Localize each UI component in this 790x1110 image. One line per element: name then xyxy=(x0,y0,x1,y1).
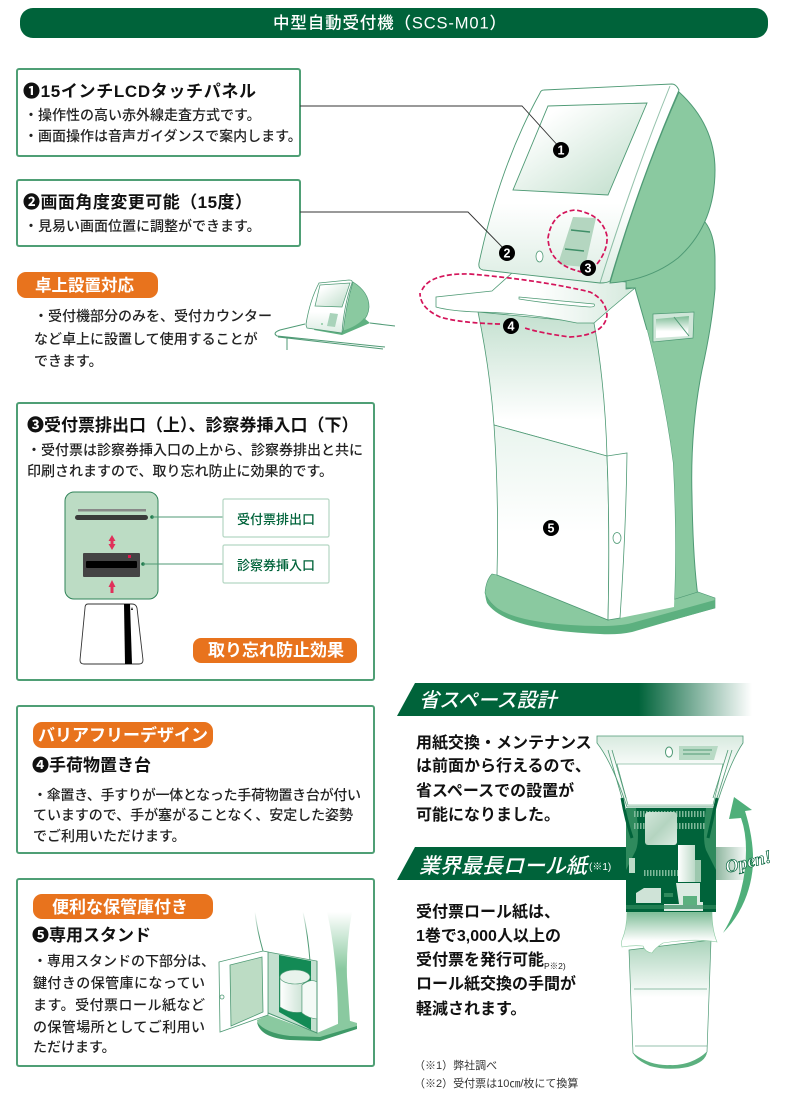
panel: ticket outlet xyxy=(17,403,374,680)
panel: storage: の保管場所としてご利用い xyxy=(33,1019,205,1035)
text block: roll paper xyxy=(416,902,576,1018)
arrow: open xyxy=(723,797,753,933)
panel: screen angle: ・見易い画面位置に調整ができます。 xyxy=(24,218,261,234)
footnotes xyxy=(414,1058,578,1090)
panel: screen angle xyxy=(17,180,300,246)
number markers: 3 xyxy=(585,262,592,276)
panel: barrier-free: ・傘置き、手すりが一体となった手荷物置き台が付い xyxy=(33,787,361,803)
text block: space-saving: 省スペースでの設置が xyxy=(416,781,574,800)
panel: ticket outlet: 印刷されますので、取り忘れ防止に効果的です。 xyxy=(27,463,333,479)
stand front xyxy=(478,312,607,456)
label: tabletop: 卓上設置対応 xyxy=(35,276,134,295)
lower column xyxy=(629,940,711,1068)
panel: LCD touch panel: ❶15インチLCDタッチパネル xyxy=(23,82,256,101)
ticket slots xyxy=(559,217,596,267)
label: tabletop xyxy=(17,272,158,298)
text block: roll paper: P※2) xyxy=(544,961,566,971)
panel: storage: ます。受付票ロール紙など xyxy=(33,997,205,1013)
text block: space-saving: は前面から行えるので、 xyxy=(416,756,591,775)
illustration: open storage xyxy=(219,912,357,1041)
open top panel xyxy=(597,736,743,807)
footnotes: （※2）受付票は10㎝/枚にて換算 xyxy=(414,1076,578,1090)
text block: roll paper: 1巻で3,000人以上の xyxy=(416,926,561,945)
slot diagram xyxy=(65,492,223,664)
text block: roll paper: 受付票を発行可能 xyxy=(416,950,544,969)
panel: barrier-free: ていますので、手が塞がることなく、安定した姿勢 xyxy=(33,807,353,823)
panel: ticket outlet: ・受付票は診察券挿入口の上から、診察券排出と共に xyxy=(27,442,363,458)
panel: storage: 便利な保管庫付き xyxy=(52,897,188,917)
text block: tabletop xyxy=(34,308,272,369)
number markers: 4 xyxy=(508,320,515,334)
panel: storage: ❺専用スタンド xyxy=(32,926,151,945)
head face xyxy=(479,84,679,283)
number markers: 1 xyxy=(558,144,565,158)
number markers: 5 xyxy=(548,522,555,536)
text block: tabletop: ・受付機部分のみを、受付カウンター xyxy=(34,308,272,324)
panel: LCD touch panel: ・操作性の高い赤外線走査方式です。 xyxy=(24,107,261,123)
banner: longest roll: (※1) xyxy=(589,862,611,873)
panel: barrier-free: ❹手荷物置き台 xyxy=(32,755,151,775)
rear column window xyxy=(653,312,694,342)
title bar xyxy=(20,8,768,38)
leader lines xyxy=(300,106,561,252)
panel: storage: ただけます。 xyxy=(33,1039,116,1055)
banner: longest roll: 業界最長ロール紙 xyxy=(418,854,592,878)
panel: LCD touch panel: ・画面操作は音声ガイダンスで案内します。 xyxy=(24,128,302,144)
stand door xyxy=(494,425,609,620)
footnotes: （※1）弊社調べ xyxy=(414,1058,497,1072)
badge: prevention xyxy=(193,638,357,663)
text block: space-saving: 用紙交換・メンテナンス xyxy=(416,734,592,752)
text block: space-saving: 可能になりました。 xyxy=(416,805,560,824)
text block: roll paper: ロール紙交換の手間が xyxy=(416,974,576,993)
illustration: tabletop kiosk xyxy=(275,280,395,350)
banner: space-saving xyxy=(397,683,752,716)
label: card insert xyxy=(223,545,329,583)
illustration: open kiosk xyxy=(597,736,774,1069)
highlight 3 xyxy=(548,210,607,272)
panel: storage xyxy=(17,879,374,1066)
label: card insert: 診察券挿入口 xyxy=(237,558,315,573)
white stand body xyxy=(595,330,675,620)
panel: storage: ・専用スタンドの下部分は、 xyxy=(33,953,215,969)
kiosk illustration xyxy=(300,84,715,634)
panel: barrier-free: バリアフリーデザイン xyxy=(38,725,208,745)
dome xyxy=(610,92,715,283)
panel: LCD touch panel xyxy=(17,69,302,156)
label: ticket outlet xyxy=(223,499,329,537)
panel: ticket outlet: ❸受付票排出口（上）、診察券挿入口（下） xyxy=(27,416,358,435)
text block: roll paper: 軽減されます。 xyxy=(416,1000,526,1018)
badge: prevention: 取り忘れ防止効果 xyxy=(208,641,344,660)
number markers xyxy=(499,142,596,536)
banner: longest roll xyxy=(397,847,748,880)
wavy apron xyxy=(622,912,717,953)
label: open: Open! xyxy=(723,846,774,877)
banner: space-saving: 省スペース設計 xyxy=(418,689,561,712)
base xyxy=(485,574,715,633)
number markers: 2 xyxy=(504,246,511,260)
panel: screen angle: ❷画面角度変更可能（15度） xyxy=(23,192,252,212)
text block: roll paper: 受付票ロール紙は、 xyxy=(416,902,560,921)
text block: tabletop: など卓上に設置して使用することが xyxy=(34,331,258,347)
label: ticket outlet: 受付票排出口 xyxy=(237,512,315,527)
highlight 4 xyxy=(420,274,607,337)
shelf xyxy=(436,273,635,323)
rear column xyxy=(626,222,715,607)
text block: space-saving xyxy=(416,734,592,824)
text block: tabletop: できます。 xyxy=(34,353,103,369)
interior xyxy=(626,808,716,912)
screen xyxy=(513,103,647,195)
panel: barrier-free: でご利用いただけます。 xyxy=(33,828,186,844)
title bar: 中型自動受付機（SCS-M01） xyxy=(273,14,506,32)
panel: barrier-free xyxy=(17,706,374,853)
panel: storage: 鍵付きの保管庫になってい xyxy=(33,975,205,991)
